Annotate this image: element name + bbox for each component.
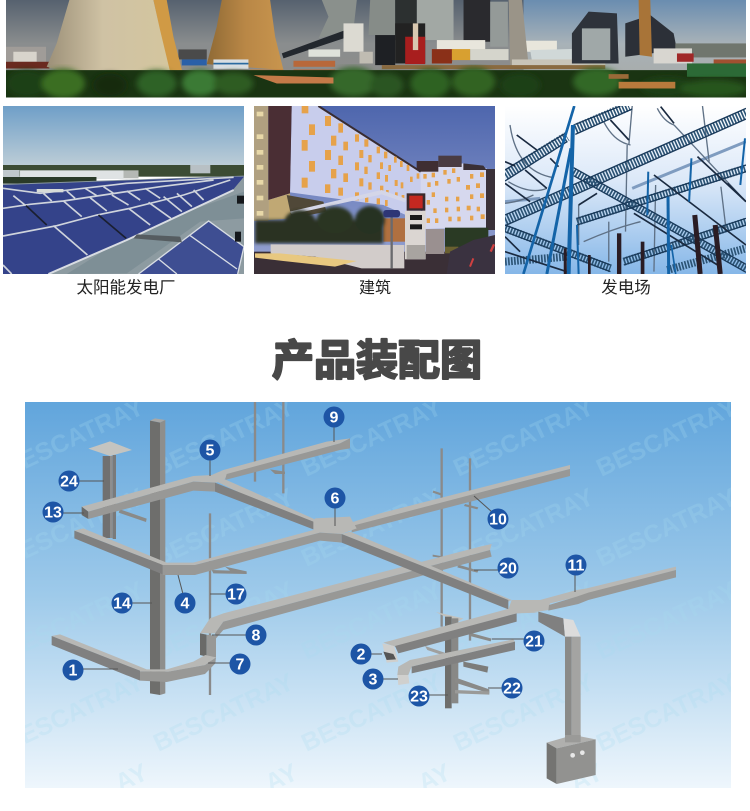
label 24: 24 [60, 474, 78, 490]
label 7 [230, 654, 250, 674]
tray 9 and 13 with tee 5 [82, 438, 350, 529]
tray 10 [340, 465, 570, 532]
label 22 [502, 678, 522, 698]
watermark pattern: AY [111, 758, 153, 797]
tray 4 and cross 6 [74, 517, 357, 575]
watermark pattern: BESCATRAY [592, 576, 741, 665]
watermark pattern: BESCATRAY [449, 576, 598, 665]
cooling tower 1 [47, 0, 172, 79]
watermark pattern: AY [261, 758, 303, 797]
tree patches [7, 67, 747, 98]
column 24 with plate [88, 441, 132, 539]
label 11: 11 [568, 558, 585, 574]
title: 产品装配图 [272, 337, 482, 384]
watermark pattern: BESCATRAY [297, 483, 446, 572]
lattice trusses [505, 106, 746, 220]
long diagonal tray and junction 11 [342, 532, 676, 613]
label 4: 4 [181, 596, 190, 612]
watermark pattern: BESCATRAY [149, 576, 298, 665]
watermark pattern: BESCATRAY [592, 668, 741, 757]
cooling tower orange sliver [153, 0, 184, 78]
label 9 [324, 406, 344, 428]
hanger rods [210, 402, 470, 695]
light trusses [505, 142, 746, 202]
tray 3 [397, 639, 515, 685]
label 2 [350, 644, 372, 664]
support column 21-23 [425, 612, 489, 708]
watermark pattern: BESCATRAY [297, 668, 446, 757]
label 24 [58, 470, 80, 492]
blue columns [523, 106, 745, 274]
label 22: 22 [503, 680, 521, 698]
label 5 [200, 440, 220, 460]
callout lines [62, 425, 575, 695]
label 20 [498, 558, 518, 578]
label 3 [362, 668, 384, 690]
caption: building: 建筑 [359, 279, 391, 297]
label 14: 14 [113, 596, 131, 612]
watermark pattern: BESCATRAY [0, 576, 148, 665]
watermark pattern: BESCATRAY [297, 393, 446, 482]
tray 2 [382, 608, 538, 663]
label 21: 21 [525, 634, 543, 650]
watermark pattern: BESCATRAY [592, 483, 741, 572]
label 6 [324, 488, 346, 508]
label 23 [408, 686, 430, 706]
watermark pattern: BESCATRAY [592, 393, 741, 482]
caption: solar plant: 太阳能发电厂 [76, 278, 176, 297]
tray 20 with bend 8 and 7, tray 1 [52, 544, 492, 682]
photo: solar power plant [3, 106, 244, 274]
watermark pattern: BESCATRAY [0, 483, 148, 572]
watermark pattern: BESCATRAY [297, 576, 446, 665]
label 14 [112, 592, 132, 614]
cooling tower 2 [207, 0, 283, 70]
label 17 [226, 584, 246, 604]
label 1 [62, 660, 84, 680]
photo: hotel building [254, 106, 495, 274]
label 7: 7 [236, 656, 245, 674]
watermark pattern: BESCATRAY [149, 668, 298, 757]
label 8: 8 [252, 628, 261, 644]
caption: power station: 发电场 [601, 278, 651, 297]
label 17: 17 [227, 586, 245, 604]
cable tray system [52, 402, 676, 784]
watermark pattern: BESCATRAY [0, 393, 148, 482]
photo: power plant banner [6, 0, 746, 98]
watermark pattern: AY [414, 758, 456, 797]
label 10: 10 [489, 512, 507, 528]
watermark pattern: BESCATRAY [449, 668, 598, 757]
label 21 [524, 630, 544, 652]
label 9: 9 [330, 410, 339, 426]
vertical riser [538, 612, 581, 740]
watermark pattern: BESCATRAY [449, 483, 598, 572]
label 13: 13 [44, 504, 62, 522]
label 8 [246, 624, 266, 646]
wires [505, 106, 746, 272]
label 10 [488, 508, 508, 530]
watermark pattern: BESCATRAY [0, 668, 148, 757]
label 11 [566, 554, 586, 576]
label 6: 6 [331, 490, 340, 508]
watermark pattern: BESCATRAY [149, 393, 298, 482]
small brackets [119, 469, 492, 641]
panel: assembly diagram [0, 393, 741, 797]
label 20: 20 [499, 560, 517, 578]
photo: power substation [505, 106, 746, 274]
column 14 [150, 418, 165, 695]
dark diagonals [505, 107, 746, 272]
insulators [565, 215, 720, 274]
junction box [547, 735, 596, 784]
watermark pattern: BESCATRAY [149, 483, 298, 572]
label 4 [174, 592, 196, 614]
watermark pattern [0, 393, 741, 797]
watermark pattern: BESCATRAY [449, 393, 598, 482]
watermark pattern: AY [566, 758, 608, 797]
label 2: 2 [357, 646, 366, 664]
label 1: 1 [69, 662, 78, 680]
label 23: 23 [410, 688, 428, 706]
label 13 [42, 502, 64, 522]
label 3: 3 [369, 672, 378, 688]
label 5: 5 [206, 442, 215, 460]
